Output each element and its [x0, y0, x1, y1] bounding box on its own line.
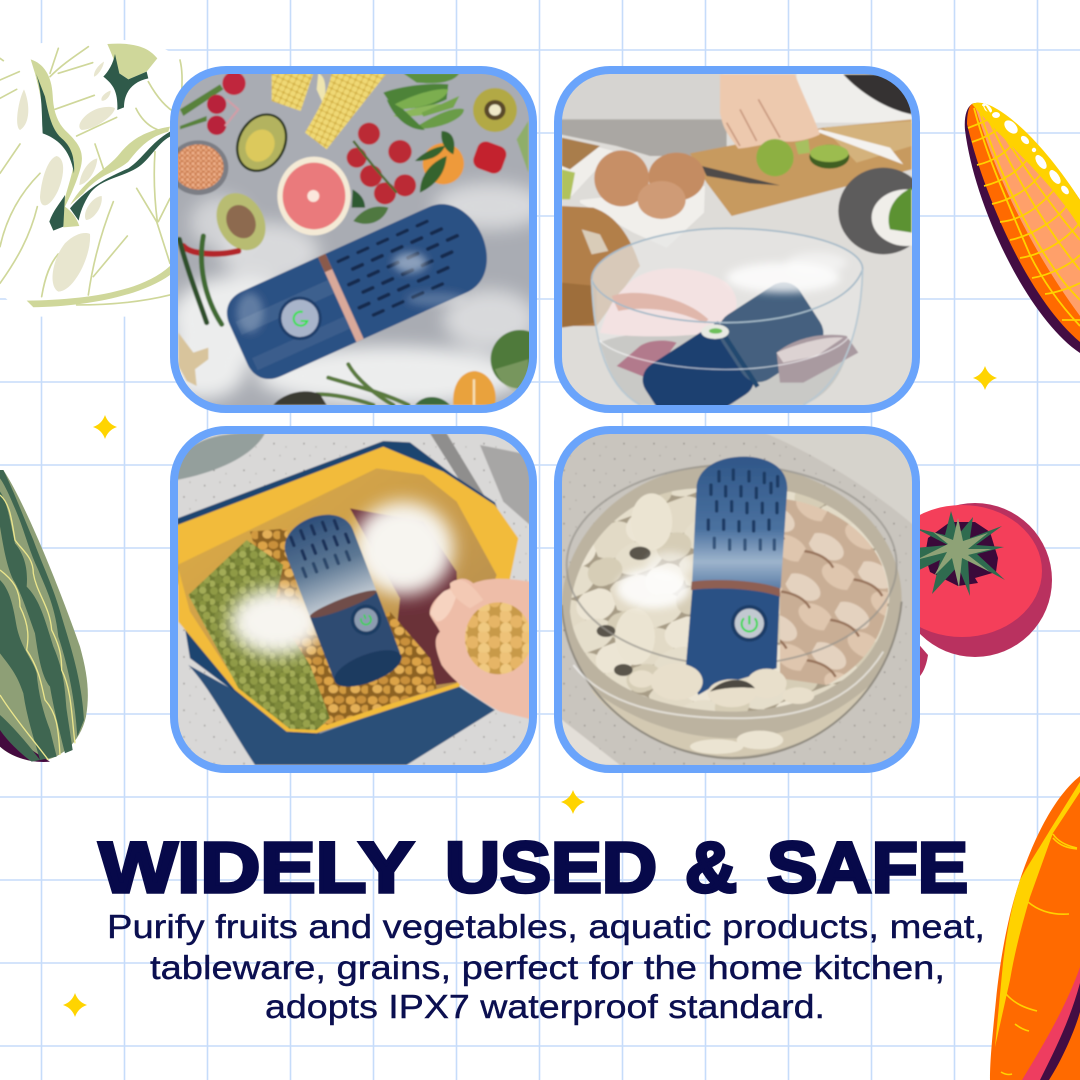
- glass bowl: [562, 463, 902, 758]
- basket interior: [177, 468, 497, 727]
- panel frame: [174, 70, 533, 409]
- melon: [490, 329, 529, 389]
- decoration: corn top right: [965, 102, 1080, 353]
- tomatoes: [347, 123, 416, 204]
- cutting board: [690, 119, 912, 216]
- red pepper: [472, 140, 508, 174]
- purifier device: [226, 203, 488, 380]
- title: SAFE: [767, 829, 968, 908]
- kiwi: [473, 88, 517, 132]
- hand with soybeans: [430, 579, 532, 719]
- panel: grains basket photo: [170, 425, 540, 772]
- hand: [720, 74, 820, 149]
- panel frame: [174, 430, 533, 769]
- avocado half with pit: [216, 192, 266, 251]
- panel: kitchen bowl photo: [554, 66, 920, 413]
- mist: [230, 502, 453, 655]
- ginger: [178, 333, 208, 386]
- panel frame: [558, 70, 916, 409]
- description text: tableware, grains, perfect for the home kitchen,: [150, 949, 945, 986]
- decoration: tomato right: [882, 503, 1052, 680]
- title: [99, 829, 968, 908]
- power button: [278, 297, 322, 340]
- radishes: [180, 72, 246, 135]
- chicken: [600, 268, 737, 336]
- corn cobs: [272, 73, 387, 149]
- green peas: [188, 540, 330, 730]
- plate right: [838, 166, 912, 256]
- meat right: [777, 335, 858, 383]
- description text: adopts IPX7 waterproof standard.: [265, 988, 825, 1025]
- glass bowl: [590, 227, 864, 405]
- food dish left: [562, 147, 612, 196]
- panel: produce photo with purifier: [160, 66, 549, 413]
- panel frame: [558, 430, 916, 769]
- basket: [188, 665, 495, 765]
- sparkle stars: [63, 366, 997, 1017]
- description text: Purify fruits and vegetables, aquatic products, meat,: [107, 908, 985, 945]
- lentil bowl: [178, 140, 229, 196]
- grapefruit: [277, 157, 351, 235]
- limes: [756, 139, 794, 176]
- yellow beans: [250, 528, 437, 725]
- device submerged: [642, 282, 824, 405]
- title: USED: [445, 829, 657, 908]
- title: &: [685, 829, 737, 908]
- snap peas: [383, 73, 464, 130]
- panel: clams and shrimp bowl photo: [550, 425, 920, 772]
- egg dish: [580, 186, 705, 238]
- red beans: [350, 508, 460, 692]
- decoration: carrot bottom right: [990, 776, 1080, 1080]
- right leaf: [517, 121, 528, 173]
- basil: [353, 206, 388, 224]
- clams in front of device: [629, 663, 814, 707]
- title: WIDELY: [99, 829, 414, 908]
- orange segment: [453, 371, 496, 405]
- mist: [237, 253, 467, 333]
- device: [277, 505, 406, 694]
- orange and leaves: [415, 131, 464, 193]
- asparagus: [317, 364, 408, 405]
- description text: [107, 908, 985, 1025]
- chilies: [179, 236, 238, 324]
- device upright: [686, 457, 787, 695]
- wooden board left: [562, 206, 640, 326]
- decoration: watermelon-striped leaf left: [0, 470, 88, 762]
- avocado half: [235, 112, 288, 173]
- decoration: pale leaf sprig top left: [0, 39, 207, 317]
